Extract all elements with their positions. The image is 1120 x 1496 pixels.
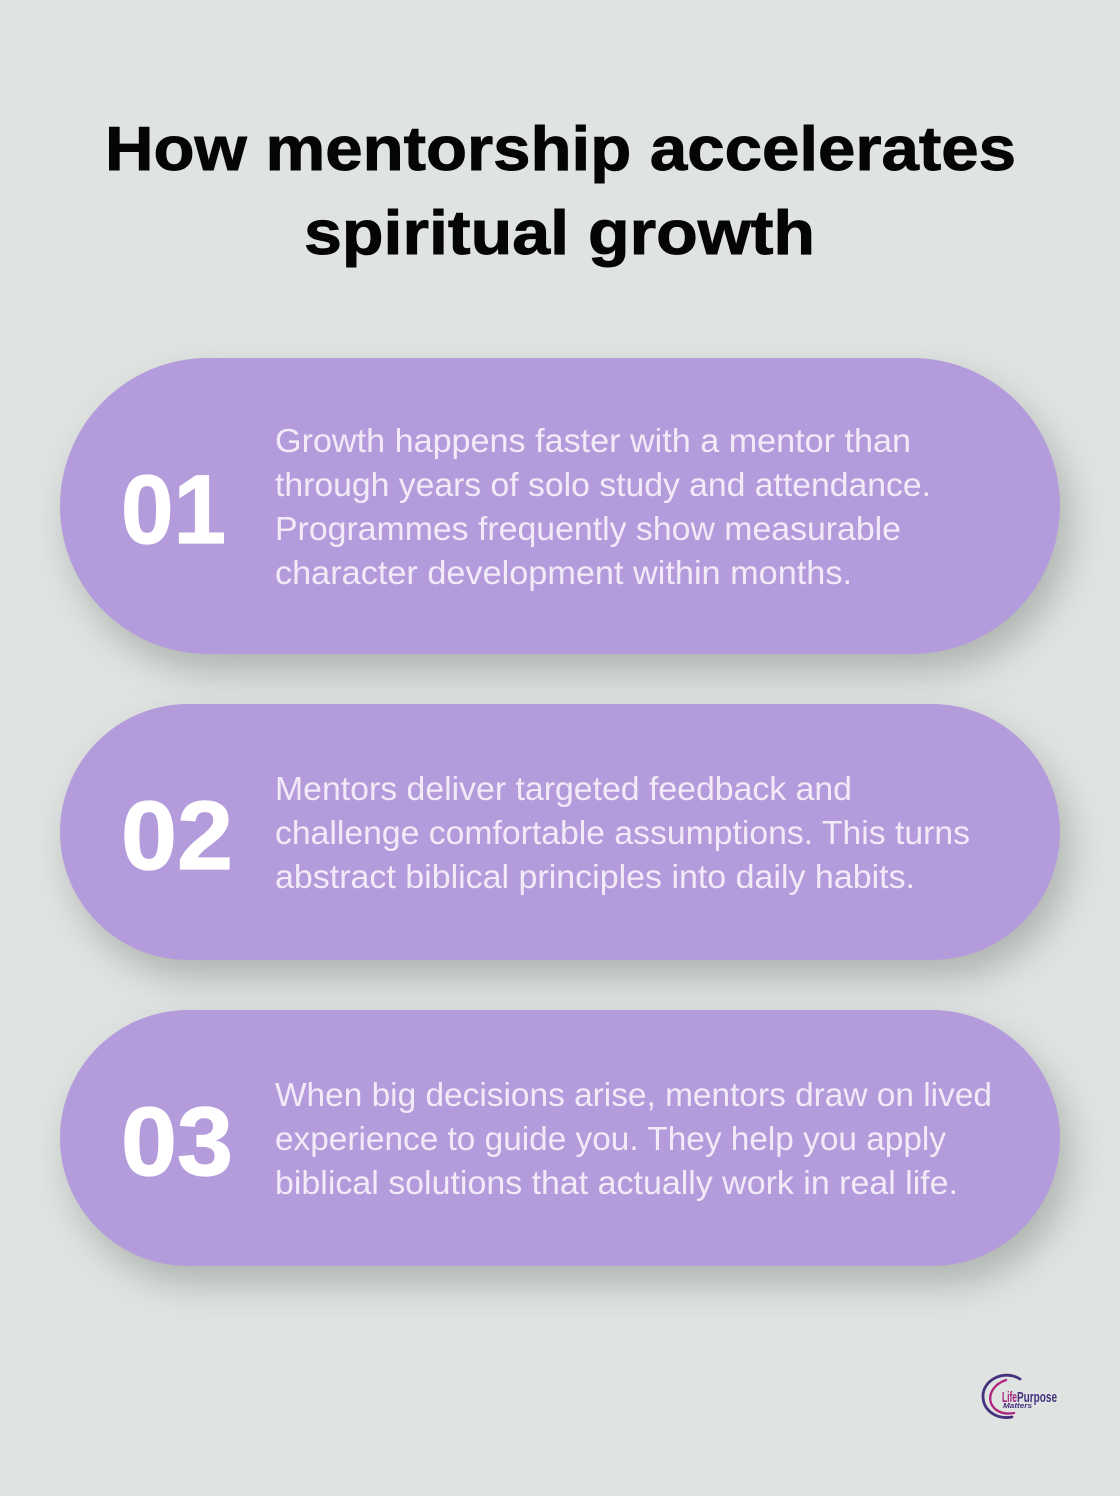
text: step 02 description: abstract biblical principles into daily habits.: [275, 858, 915, 895]
number: 01: 01: [121, 455, 226, 564]
number: 03: 03: [121, 1087, 233, 1196]
wordmark: [1002, 1389, 1057, 1410]
text: step 01 description: character development within months.: [275, 554, 852, 591]
text: step 02 description: [275, 770, 970, 895]
text: step 01 description: Growth happens faster with a mentor than: [275, 422, 911, 459]
text: step 01 description: Programmes frequently show measurable: [275, 510, 901, 547]
text: step 03 description: biblical solutions that actually work in real life.: [275, 1164, 958, 1201]
text: step 03 description: When big decisions arise, mentors draw on lived: [275, 1076, 992, 1113]
title: [105, 115, 1016, 268]
panel: step 02: [60, 704, 1060, 960]
number: 02: 02: [121, 781, 233, 890]
text: step 01 description: through years of solo study and attendance.: [275, 466, 931, 503]
wordmark: Purpose: [1017, 1389, 1057, 1406]
icon: crescent arcs: [983, 1375, 1020, 1418]
text: step 03 description: experience to guide you. They help you apply: [275, 1120, 947, 1157]
panel: step 03: [60, 1010, 1060, 1266]
title: How mentorship accelerates: [105, 115, 1016, 184]
wordmark: Life: [1002, 1389, 1017, 1406]
panel: step 01: [60, 358, 1060, 654]
wordmark: Matters: [1003, 1403, 1032, 1410]
title: spiritual growth: [304, 199, 815, 268]
text: step 01 description: [275, 422, 931, 591]
text: step 02 description: challenge comfortable assumptions. This turns: [275, 814, 970, 851]
text: step 03 description: [275, 1076, 992, 1201]
logo: Life Purpose Matters: [983, 1375, 1057, 1418]
text: step 02 description: Mentors deliver targeted feedback and: [275, 770, 852, 807]
